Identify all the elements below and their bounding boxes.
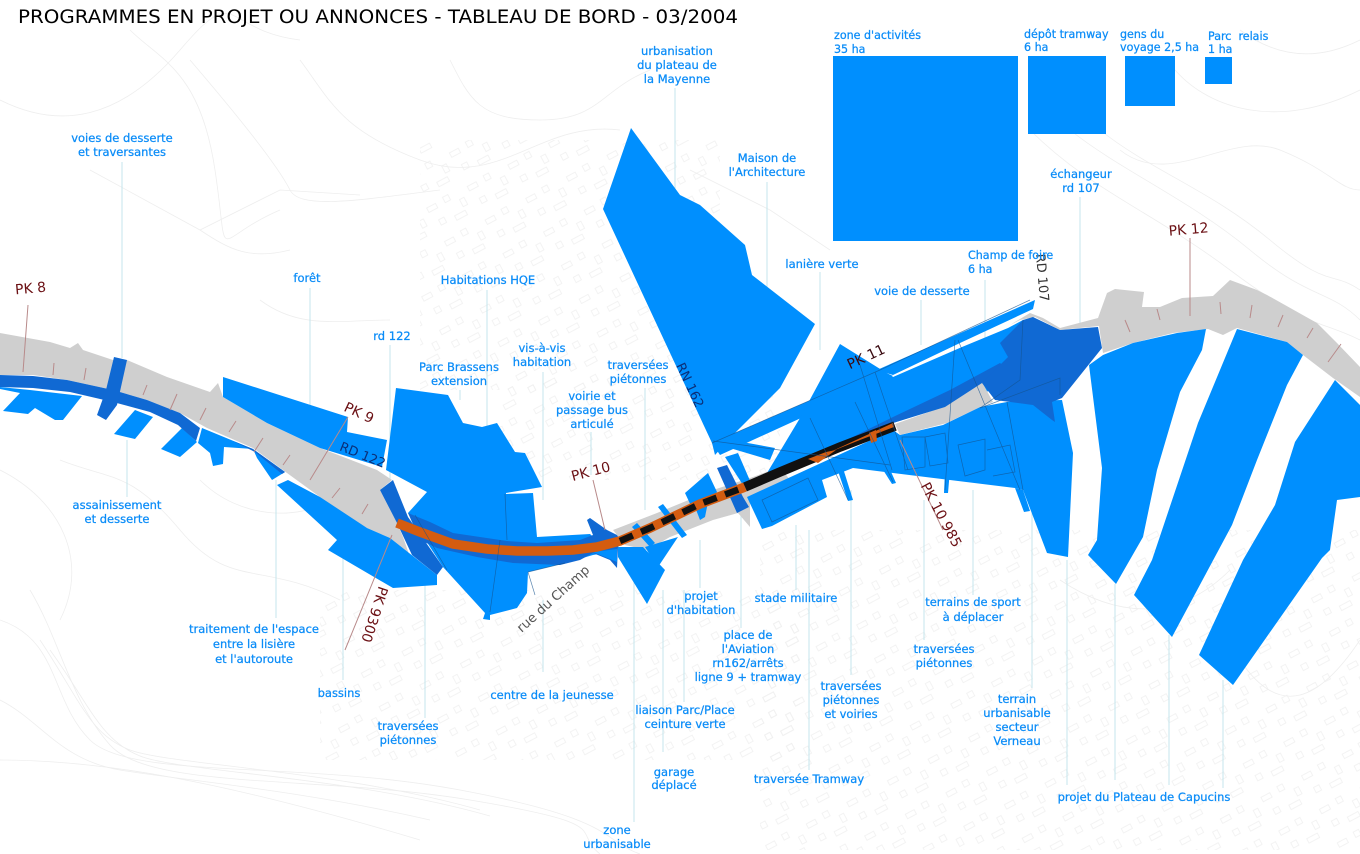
label: projet du Plateau de Capucins: projet du Plateau de Capucins xyxy=(1058,790,1230,804)
label: gens du voyage: gens du xyxy=(1120,28,1164,41)
label: voirie et passage bus: passage bus xyxy=(556,403,628,417)
label: dépôt tramway: dépôt tramway xyxy=(1024,28,1109,41)
PK 10 985: PK 10 985 xyxy=(917,480,964,550)
label: échangeur: rd 107 xyxy=(1062,181,1100,195)
label: terrains de sport: terrains de sport xyxy=(925,595,1021,609)
label: zone urbanisable: zone xyxy=(603,823,631,837)
kilometre tick marks xyxy=(23,238,1341,650)
label: place de l'Aviation: l'Aviation xyxy=(722,642,774,656)
square: gens du voyage 2,5 ha xyxy=(1125,56,1175,106)
label: traversées piétonnes: traversées xyxy=(377,719,439,733)
label: projet d'habitation: d'habitation xyxy=(667,603,735,617)
grey motorway left xyxy=(0,333,410,557)
label: terrain urbanisable: urbanisable xyxy=(983,706,1051,720)
label: traversées piétonnes: traversées xyxy=(607,358,669,372)
label: traversées piétonnes: piétonnes xyxy=(610,372,666,386)
label: gens du voyage: voyage 2,5 ha xyxy=(1120,41,1199,54)
label: traversées piétonnes et voiries: traversées xyxy=(820,679,882,693)
small blue pieces xyxy=(593,453,751,604)
dark crossing place de l'Aviation xyxy=(717,465,749,513)
label: assainissement: assainissement xyxy=(73,498,161,512)
label: place de l'Aviation: place de xyxy=(724,628,772,642)
title: PROGRAMMES EN PROJET OU ANNONCES - TABLEAU DE BORD - 03/2004 xyxy=(18,7,738,28)
plateau de Capucins strip A xyxy=(1088,329,1206,584)
PK 9300: PK 9300 xyxy=(357,584,390,644)
rue du Champ: rue du Champ xyxy=(514,563,593,636)
label: vis-à-vis: vis-à-vis xyxy=(518,341,566,355)
label: traitement de l'espace: traitement de l'espace xyxy=(189,622,319,636)
forêt area xyxy=(223,377,387,467)
label: Parc Brassens: Parc Brassens xyxy=(419,360,499,374)
échangeur rd 107 xyxy=(982,317,1102,422)
terrains lower area xyxy=(747,400,1073,557)
label: rd 122: rd 122 xyxy=(373,329,411,343)
RD 122: RD 122 xyxy=(337,440,387,472)
dark crossing at PK 9300 xyxy=(380,480,443,575)
label: projet d'habitation: projet xyxy=(684,589,718,603)
blue teeth lower left xyxy=(0,387,285,480)
label: assainissement: et desserte xyxy=(84,512,150,526)
label: parc relais: Parc relais xyxy=(1208,30,1268,43)
label: terrains de sport: à déplacer xyxy=(943,610,1004,624)
label: garage déplacé: déplacé xyxy=(651,778,697,792)
label: place de l'Aviation: rn162/arrêts xyxy=(712,656,784,670)
square: zone d'activités 35 ha xyxy=(833,56,1018,241)
PK 8: PK 8 xyxy=(15,280,47,298)
square: dépôt tramway 6 ha xyxy=(1028,56,1106,134)
label: traversées piétonnes: piétonnes xyxy=(380,733,436,747)
label: parc relais: 1 ha xyxy=(1208,43,1232,56)
label: voie de desserte: voie de desserte xyxy=(874,284,970,298)
black tramway track xyxy=(745,426,895,487)
grey road east segment xyxy=(895,382,993,435)
label: urbanisation: du plateau de xyxy=(637,58,717,72)
label: liaison Parc/Place: liaison Parc/Place xyxy=(635,703,735,717)
plateau de Capucins strip C xyxy=(1199,380,1360,685)
label: urbanisation: la Mayenne xyxy=(644,72,710,86)
dark wedge along road xyxy=(800,363,1005,463)
PK 10: PK 10 xyxy=(570,459,612,485)
PK 12: PK 12 xyxy=(1168,220,1209,240)
label: traversée Tramway: traversée Tramway xyxy=(754,772,864,786)
plateau de Capucins strip B xyxy=(1134,329,1303,637)
label: liaison Parc/Place: ceinture verte xyxy=(644,717,726,731)
label: garage déplacé: garage xyxy=(654,765,694,779)
label: voies de desserte: et traversantes xyxy=(78,145,166,159)
leader lines xyxy=(122,88,1223,822)
label: lanière verte: lanière verte xyxy=(785,257,859,271)
bassins area xyxy=(277,480,437,588)
dark blue band left xyxy=(0,375,200,441)
RN 162 plateau de la Mayenne xyxy=(603,128,815,455)
dark band central xyxy=(408,513,622,568)
lanière verte strips xyxy=(712,300,1035,460)
label: voies de desserte: voies de desserte xyxy=(71,131,173,145)
bars crossing xyxy=(836,465,1030,512)
label: terrain urbanisable: secteur xyxy=(996,720,1039,734)
kilometre point labels xyxy=(15,220,1209,644)
label: terrain urbanisable: Verneau xyxy=(993,734,1041,748)
dark strip along road xyxy=(233,441,285,474)
label: traversées piétonnes: traversées xyxy=(913,642,975,656)
label: zone urbanisable: urbanisable xyxy=(583,837,651,851)
thin outlines on areas xyxy=(415,300,1060,612)
dark blue crossing xyxy=(97,357,127,420)
label: échangeur: échangeur xyxy=(1050,167,1112,181)
label: centre de la jeunesse: centre de la jeunesse xyxy=(490,688,614,702)
voie de desserte and activities wedge xyxy=(767,320,1023,473)
label: traversées piétonnes et voiries: et voiries xyxy=(824,707,878,721)
label: Parc Brassens: extension xyxy=(431,374,487,388)
label: place de l'Aviation: ligne 9 + tramway xyxy=(695,670,802,684)
orange overlay on track xyxy=(808,423,894,463)
road corridor and programme areas map xyxy=(0,128,1360,685)
grey road middle xyxy=(613,467,790,550)
label: dépôt tramway: 6 ha xyxy=(1024,41,1048,54)
label: vis-à-vis: habitation xyxy=(513,355,571,369)
label: zone d'activités: zone d'activités xyxy=(834,29,921,42)
label: Maison de l'Architecture: Maison de xyxy=(738,151,796,165)
label: Champ de foire: 6 ha xyxy=(968,263,992,276)
grey motorway right xyxy=(1010,280,1360,397)
label: urbanisation: urbanisation xyxy=(641,44,713,58)
label: traitement de l'espace: et l'autoroute xyxy=(215,652,293,666)
RD 107: RD 107 xyxy=(1032,253,1051,302)
RN 162: RN 162 xyxy=(672,361,706,410)
area squares xyxy=(833,56,1232,241)
label: voirie et passage bus: articulé xyxy=(570,417,614,431)
PK 9: PK 9 xyxy=(341,400,376,427)
label: stade militaire: stade militaire xyxy=(755,591,837,605)
label: forêt: forêt xyxy=(293,271,321,285)
label: Maison de l'Architecture: l'Architecture xyxy=(729,165,805,179)
label: terrain urbanisable: terrain xyxy=(998,692,1036,706)
label: traversées piétonnes et voiries: piétonnes xyxy=(823,693,879,707)
label: Habitations HQE: Habitations HQE xyxy=(441,273,535,287)
centre de la jeunesse area xyxy=(408,492,610,620)
label: voirie et passage bus: voirie et xyxy=(568,389,616,403)
black dashed track xyxy=(620,487,745,541)
label: zone d'activités: 35 ha xyxy=(834,43,865,56)
PK 11: PK 11 xyxy=(845,342,888,373)
orange tramway corridor xyxy=(397,487,745,551)
square: parc relais 1 ha xyxy=(1205,57,1232,84)
label: Champ de foire: Champ de foire xyxy=(968,249,1053,262)
label: bassins: bassins xyxy=(318,686,360,700)
label: traversées piétonnes: piétonnes xyxy=(916,656,972,670)
label: traitement de l'espace: entre la lisière xyxy=(213,637,295,651)
Parc Brassens area xyxy=(386,388,542,542)
